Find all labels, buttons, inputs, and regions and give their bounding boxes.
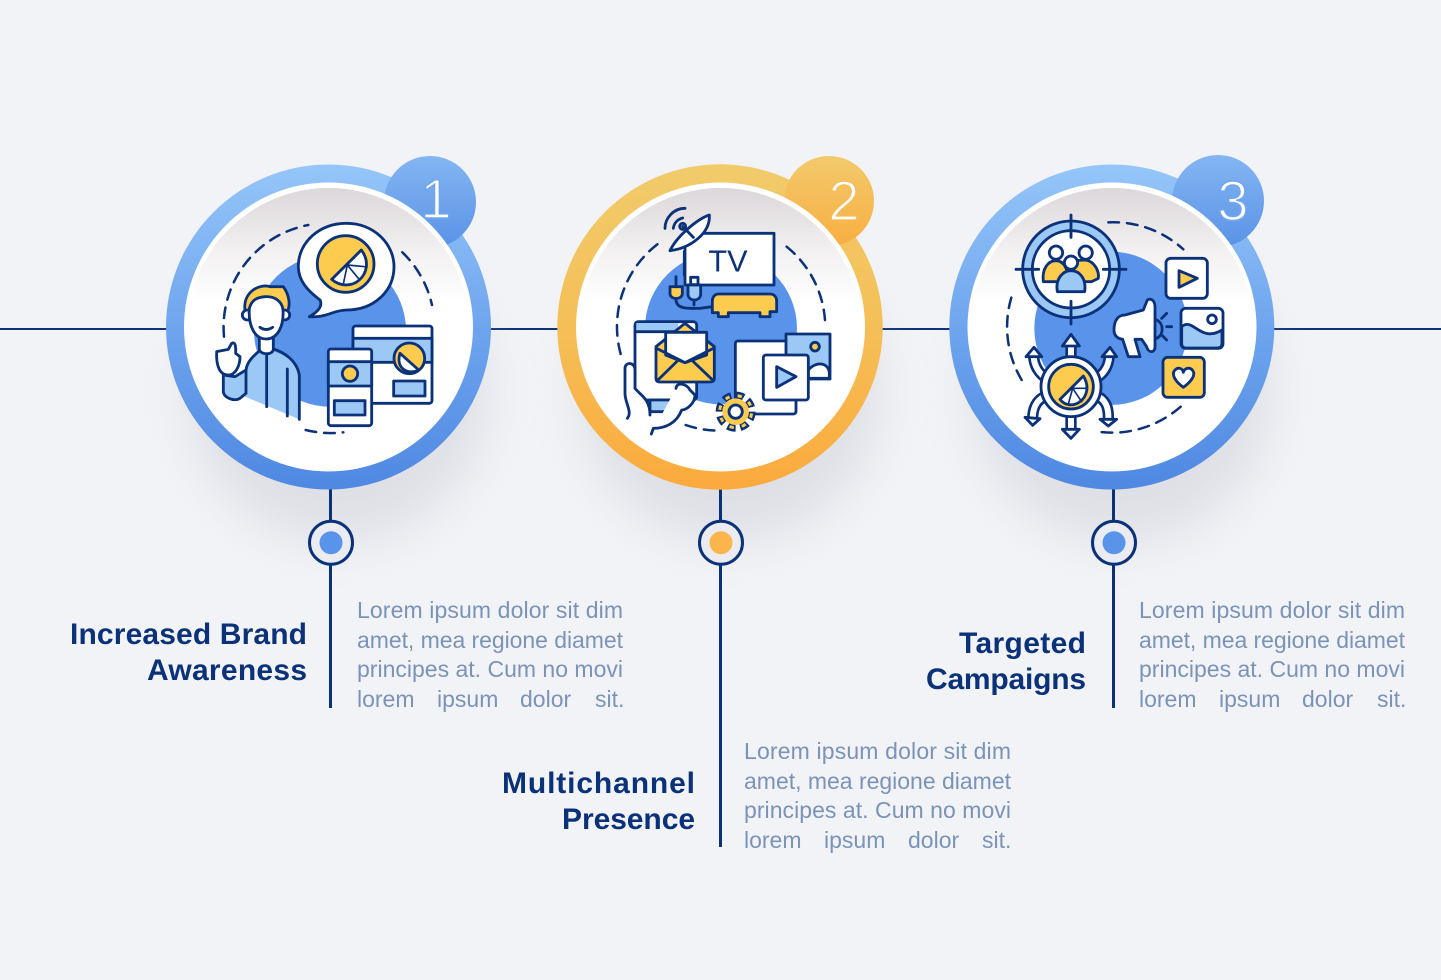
horizontal timeline line	[0, 328, 1441, 330]
text block: step 1 description: ipsum	[437, 686, 498, 712]
text block: step 2 description: amet, mea regione diamet	[744, 768, 1012, 794]
step 1 outer ring	[166, 164, 491, 490]
text block: step 3 description	[1139, 597, 1406, 712]
text block: step 2 description: dolor	[908, 827, 959, 853]
text block: step 3 description: dolor	[1302, 686, 1353, 712]
text block: step 1 description: amet, mea regione diamet	[357, 627, 624, 653]
heading: Targeted Campaigns: Targeted	[959, 627, 1086, 660]
heading: Increased Brand Awareness	[70, 618, 307, 687]
step 2 number badge	[784, 156, 874, 246]
step 1 number badge: 1	[420, 167, 452, 230]
step 2 outer ring	[557, 164, 883, 490]
step 3 inner disc	[968, 182, 1256, 472]
text block: step 1 description: Lorem ipsum dolor sit dim	[357, 597, 623, 623]
step 2 number badge: 2	[828, 169, 860, 232]
panel: step 3 circle	[949, 155, 1274, 490]
text block: step 2 description	[744, 738, 1012, 853]
step 3 number badge	[1172, 155, 1264, 247]
text block: step 2 description: Lorem ipsum dolor sit dim	[744, 738, 1011, 764]
text block: step 3 description: lorem	[1139, 686, 1197, 712]
text block: step 2 description: sit.	[982, 827, 1011, 853]
heading: Targeted Campaigns	[926, 627, 1086, 696]
icon: TV, email, video and satellite channels: TV	[708, 245, 748, 279]
heading: Multichannel Presence: Multichannel	[502, 767, 695, 800]
icon: TV, email, video and satellite channels	[617, 208, 830, 434]
icon: audience target, megaphone and content cards	[1007, 215, 1223, 438]
text block: step 1 description: dolor	[520, 686, 571, 712]
vertical connector lines	[330, 488, 1114, 847]
panel: step 1 circle	[166, 156, 491, 490]
heading: Increased Brand Awareness: Awareness	[147, 654, 307, 687]
heading: Increased Brand Awareness: Increased Brand	[70, 618, 307, 651]
text block: step 3 description: principes at. Cum no movi	[1139, 656, 1405, 682]
node marker 2	[700, 521, 742, 564]
arrows radiating from brand wheel	[1025, 334, 1117, 438]
shadows under circles	[188, 242, 1272, 542]
text block: step 1 description: sit.	[595, 686, 624, 712]
heading: Multichannel Presence	[502, 767, 695, 836]
text block: step 3 description: sit.	[1377, 686, 1406, 712]
heading: Multichannel Presence: Presence	[562, 803, 695, 836]
text block: step 2 description: lorem	[744, 827, 802, 853]
step 1 inner disc	[184, 182, 473, 472]
text block: step 2 description: principes at. Cum no movi	[744, 797, 1011, 823]
step 2 inner disc	[576, 182, 865, 472]
step 3 number badge: 3	[1217, 169, 1249, 232]
text block: step 1 description	[357, 597, 624, 712]
text block: step 1 description: principes at. Cum no movi	[357, 656, 623, 682]
panel: step 2 circle	[557, 156, 883, 490]
icon: person with brand speech bubble and screens	[217, 223, 432, 433]
heading: Targeted Campaigns: Campaigns	[926, 663, 1086, 696]
text block: step 3 description: ipsum	[1219, 686, 1280, 712]
text block: step 3 description: amet, mea regione diamet	[1139, 627, 1406, 653]
step 1 number badge	[384, 156, 476, 248]
text block: step 3 description: Lorem ipsum dolor sit dim	[1139, 597, 1405, 623]
step 3 outer ring	[949, 164, 1274, 490]
node marker 3	[1092, 521, 1136, 564]
text block: step 1 description: lorem	[357, 686, 415, 712]
text block: step 2 description: ipsum	[824, 827, 885, 853]
node marker 1	[310, 521, 352, 564]
